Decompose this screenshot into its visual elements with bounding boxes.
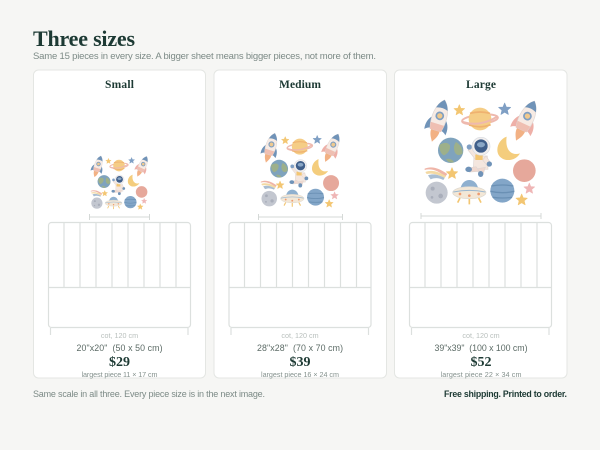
heading: large: Large — [466, 79, 496, 91]
cot outline — [229, 222, 371, 335]
size label: 28"x28" (70 x 70 cm) — [257, 343, 343, 353]
price: $29 — [109, 355, 130, 370]
dimension line: 100 cm — [421, 213, 541, 219]
shipping note: Free shipping. Printed to order. — [444, 389, 567, 399]
dimension line: 50 cm — [90, 214, 150, 220]
largest piece: largest piece 11 × 17 cm — [82, 370, 158, 379]
cot outline — [48, 222, 190, 335]
size label: 39"x39" (100 x 100 cm) — [434, 343, 528, 353]
heading: small: Small — [105, 79, 134, 91]
largest piece: largest piece 22 × 34 cm — [440, 370, 522, 379]
largest piece: largest piece 16 × 24 cm — [261, 370, 339, 379]
panel: medium — [214, 70, 386, 379]
cot label: cot, 120 cm — [101, 331, 138, 340]
cot outline — [410, 222, 552, 335]
price: $39 — [290, 355, 310, 370]
price: $52 — [470, 355, 492, 370]
cot label: cot, 120 cm — [281, 331, 319, 340]
subtitle: Same 15 pieces in every size. A bigger sheet means bigger pieces, not more of them. — [33, 51, 376, 62]
artwork: large sheet — [421, 96, 545, 205]
artwork: medium sheet — [258, 131, 345, 207]
footnote: Same scale in all three. Every piece size is in the next image. — [33, 389, 265, 399]
title: Three sizes — [33, 26, 135, 51]
cot label: cot, 120 cm — [462, 331, 500, 340]
artwork: small sheet — [89, 154, 152, 209]
panel: large — [394, 70, 567, 379]
heading: medium: Medium — [279, 79, 321, 91]
size label: 20"x20" (50 x 50 cm) — [76, 343, 163, 353]
panel: small — [34, 70, 206, 379]
dimension line: 70 cm — [258, 214, 342, 220]
